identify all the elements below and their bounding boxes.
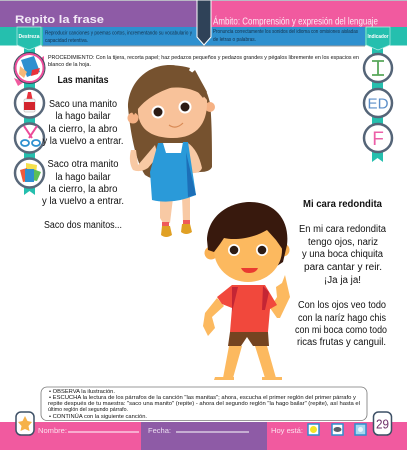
poem: Mi cara redondita: con mi boca como todo [295, 325, 387, 336]
illustration: girl [128, 65, 215, 237]
poem: Mi cara redondita: Con los ojos veo todo [298, 300, 386, 311]
poem: Mi cara redondita: ¡Ja ja ja! [324, 275, 361, 286]
icon: letter F: F [372, 129, 384, 150]
icon: letter I [364, 54, 392, 82]
poem: Mi cara redondita [295, 199, 387, 348]
poem: Mi cara redondita: con la naríz hago chis [298, 313, 386, 324]
poem: Mi cara redondita: Mi cara redondita [303, 199, 382, 210]
poem: Las manitas: Saco dos manitos... [44, 220, 122, 231]
instructions box: último reglón del segundo párrafo. [48, 407, 128, 413]
indicator description [213, 29, 358, 43]
poem: Mi cara redondita: tengo ojos, nariz [308, 237, 378, 248]
tag: Destreza [17, 27, 41, 50]
skill description [45, 30, 192, 44]
poem: Las manitas: la cierro, la abro [48, 184, 118, 195]
poem: Mi cara redondita: ricas frutas y canguil. [297, 337, 386, 348]
icon: glue bottle [15, 88, 44, 118]
indicator description: de letras o palabras. [213, 37, 256, 43]
instructions box [41, 387, 367, 420]
poem: Mi cara redondita: En mi cara redondita [299, 224, 386, 235]
poem: Las manitas [42, 75, 124, 231]
poem: Mi cara redondita: y una boca chiquita [302, 249, 383, 260]
tag: Indicador [366, 27, 390, 50]
icon: letters ED [364, 89, 392, 117]
label: Nombre [38, 426, 139, 435]
poem: Las manitas: Saco otra manito [48, 159, 119, 170]
poem: Las manitas: y la vuelvo a entrar. [42, 136, 124, 147]
poem: Las manitas: la hago bailar [56, 172, 111, 183]
icon: star badge [16, 412, 34, 435]
icon: coloured paper [15, 158, 44, 188]
title: Repito la frase: Repito la frase [15, 14, 104, 26]
illustration: boy [203, 202, 290, 380]
procedure text: blanco de la hoja. [48, 62, 91, 68]
instructions box: repite después de tu maestra: "saco una manito" (repite) - ahora del segundo reglón "la hago bailar" (repite), así hasta el [48, 401, 360, 407]
poem: Las manitas: la cierro, la abro [48, 124, 118, 135]
icon: letter F [364, 124, 392, 152]
icon: hands tearing paper [14, 52, 45, 86]
poem: Las manitas: Saco una manito [49, 99, 117, 110]
procedure text [48, 55, 359, 68]
procedure text: PROCEDIMIENTO: Con la tijera, recorta papel; haz pedazos pequeños y pedazos grandes y pégalos libremente en los espacios en [48, 55, 359, 61]
skill description: capacidad retentiva. [45, 38, 88, 44]
poem: Las manitas: la hago bailar [56, 111, 111, 122]
page number badge [374, 412, 392, 435]
indicator description: Pronuncia correctamente los sonidos del idioma con omisiones aisladas [213, 29, 358, 35]
icon: sun [308, 424, 319, 435]
instructions box: • CONTINÚA con la siguiente canción. [49, 413, 147, 420]
center arrow marker [197, 0, 211, 45]
label: Fecha: Fecha: [148, 426, 171, 435]
page number badge: 29 [376, 418, 389, 432]
footer band [0, 422, 407, 450]
icon: letters ED: ED [368, 96, 389, 112]
label: Nombre: Nombre: [38, 426, 67, 435]
poem: Mi cara redondita: para cantar y reir. [304, 262, 382, 273]
tag: Indicador: Indicador [368, 34, 388, 40]
icon: rain [355, 424, 366, 435]
tag: Destreza: Destreza [18, 34, 40, 40]
poem: Las manitas: Las manitas [58, 75, 109, 86]
header band [0, 0, 407, 46]
poem: Las manitas: y la vuelvo a entrar. [42, 196, 124, 207]
icon: cloud [332, 424, 343, 435]
label: Fecha [148, 426, 249, 435]
left ribbon [24, 45, 35, 195]
icon: scissors [15, 124, 44, 152]
right ribbon [372, 45, 383, 162]
instructions box: • OBSERVA la ilustración. [49, 389, 115, 395]
skill description: Reproducir canciones y poemas cortos, incrementando su vocabulario y [45, 30, 192, 36]
label: Hoy está: Hoy está: [271, 426, 303, 435]
instructions box: • ESCUCHA la lectura de los párrafos de la canción "las manitas"; ahora, escucha el primer reglón del primer párrafo y [49, 395, 356, 401]
